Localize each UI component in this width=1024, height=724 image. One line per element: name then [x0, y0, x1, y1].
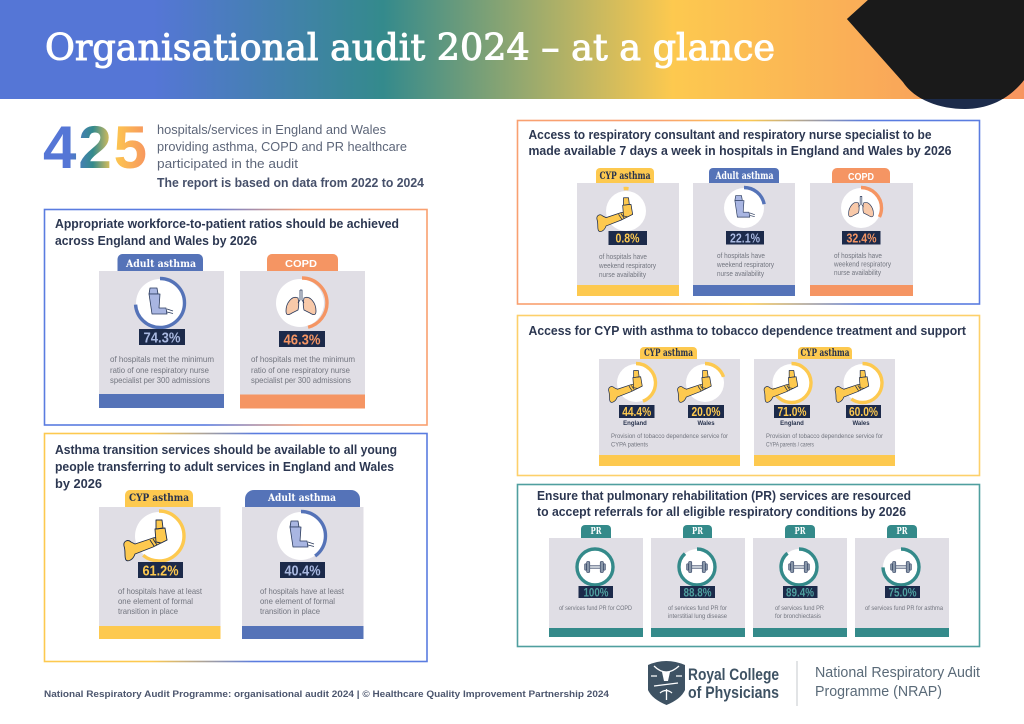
card: PR for interstitial lung disease 88.8%: interstitial lung disease [668, 613, 727, 620]
panel: asthma transition [44, 434, 427, 662]
heading: asthma transition: people transferring to adult services in England and Wales [55, 459, 394, 474]
card: PR for COPD 100% [549, 525, 643, 637]
card: PR for bronchiectasis 89.4%: PR [794, 527, 806, 537]
card: adult asthma 22.1%: weekend respiratory [716, 260, 774, 269]
intro text: providing asthma, COPD and PR healthcare [157, 140, 407, 154]
intro text: participated in the audit [157, 157, 299, 171]
footer credit: National Respiratory Audit Programme: organisational audit 2024 | © Healthcare Quality Improvement Partnership 2024 [44, 689, 609, 699]
card: PR for interstitial lung disease 88.8%: 88.8% [684, 586, 712, 600]
card: adult asthma 40.4%: of hospitals have at least [260, 586, 345, 596]
panel: pulmonary rehabilitation [518, 484, 980, 646]
card: PR for asthma 75.0%: 75.0% [888, 586, 917, 600]
heading: asthma transition: by 2026 [55, 476, 102, 491]
card: CYPA patients: Wales [697, 421, 715, 427]
heading: seven-day access [528, 127, 952, 158]
card: PR for asthma 75.0%: of services fund PR for asthma [865, 605, 943, 612]
intro text: The report is based on data from 2022 to 2024 [157, 176, 424, 190]
card: CYPA patients: Provision of tobacco dependence service for [611, 433, 729, 440]
card: CYPA parents and carers: 71.0% [778, 404, 807, 419]
card: adult asthma 74.3%: 74.3% [144, 330, 180, 346]
card: CYP asthma 0.8%: of hospitals have [599, 252, 647, 261]
card: PR for interstitial lung disease 88.8%: PR [692, 527, 703, 537]
card: CYP asthma 61.2%: one element of formal [118, 596, 193, 606]
card: CYP asthma 0.8% [577, 168, 679, 296]
heading: asthma transition [55, 442, 397, 491]
card: adult asthma 74.3%: Adult asthma [125, 259, 196, 270]
card: PR for interstitial lung disease 88.8% [651, 525, 745, 637]
card: adult asthma 22.1%: Adult asthma [715, 171, 774, 182]
heading: pulmonary rehabilitation: to accept referrals for all eligible respiratory conditions by 2026 [537, 504, 906, 519]
card: adult asthma 74.3%: of hospitals met the minimum [110, 354, 214, 364]
card: COPD 32.4%: nurse availability [834, 268, 881, 277]
logo text: NRAP: National Respiratory Audit [815, 664, 981, 681]
heading: pulmonary rehabilitation: Ensure that pulmonary rehabilitation (PR) services are resourced [537, 488, 911, 503]
card: adult asthma 40.4%: Adult asthma [267, 493, 336, 504]
intro text [157, 123, 424, 190]
card: COPD 32.4%: COPD [848, 172, 874, 183]
card: CYPA patients: CYPA patients [611, 442, 648, 448]
card: COPD 46.3%: 46.3% [284, 332, 320, 348]
heading: seven-day access: made available 7 days a week in hospitals in England and Wales by 2026 [528, 143, 952, 158]
panel: workforce ratios [44, 210, 427, 425]
card: CYPA parents and carers: CYP asthma [800, 348, 850, 359]
heading: workforce ratios [55, 216, 399, 248]
card: adult asthma 22.1%: nurse availability [717, 269, 764, 278]
card: PR for COPD 100%: PR [590, 527, 602, 537]
card: adult asthma 22.1% [693, 168, 795, 296]
card: CYP asthma 0.8%: weekend respiratory [598, 261, 656, 270]
heading: workforce ratios: across England and Wales by 2026 [55, 233, 257, 248]
card: CYP asthma 61.2%: 61.2% [142, 562, 178, 580]
card: CYP asthma 61.2%: CYP asthma [129, 493, 189, 504]
card: PR for bronchiectasis 89.4% [753, 525, 847, 637]
card: COPD 46.3%: of hospitals met the minimum [251, 354, 355, 364]
panel: tobacco dependence [518, 316, 980, 476]
card: CYPA parents and carers: England [780, 421, 804, 427]
card: CYP asthma 61.2%: of hospitals have at least [118, 586, 203, 596]
card: adult asthma 74.3% [99, 254, 224, 408]
card: CYP asthma 0.8%: 0.8% [616, 230, 640, 246]
card: CYPA patients [599, 347, 740, 466]
card: PR for bronchiectasis 89.4%: of services fund PR [775, 605, 824, 612]
card: COPD 32.4%: of hospitals have [834, 251, 882, 260]
logo: Royal College of Physicians [648, 661, 779, 705]
heading: asthma transition: Asthma transition services should be available to all young [55, 442, 397, 457]
logo text: NRAP [815, 664, 981, 700]
card: adult asthma 74.3%: ratio of one respiratory nurse [110, 365, 209, 375]
card: PR for asthma 75.0%: PR [896, 527, 908, 537]
card: adult asthma 40.4%: transition in place [260, 606, 320, 616]
header banner [0, 0, 1024, 109]
title: Organisational audit 2024 – at a glance [45, 28, 775, 69]
card: CYPA parents and carers: Wales [852, 421, 870, 427]
card: PR for COPD 100%: of services fund PR for COPD [559, 605, 632, 612]
card: COPD 32.4%: weekend respiratory [833, 260, 891, 268]
card: adult asthma 22.1%: 22.1% [730, 230, 760, 246]
card: CYPA parents and carers: 60.0% [849, 404, 878, 419]
heading: workforce ratios: Appropriate workforce-to-patient ratios should be achieved [55, 216, 399, 231]
card: CYPA patients: 20.0% [692, 404, 721, 419]
card: CYPA patients: England [623, 421, 647, 427]
card: adult asthma 74.3%: specialist per 300 admissions [110, 375, 210, 385]
logo text: NRAP: Programme (NRAP) [815, 683, 942, 700]
card: CYP asthma 61.2%: transition in place [118, 606, 178, 616]
card: CYPA patients: CYP asthma [644, 348, 693, 359]
card: CYP asthma 0.8%: nurse availability [599, 270, 646, 279]
heading: pulmonary rehabilitation [537, 488, 911, 519]
key figure: 425: 425 [43, 114, 147, 181]
card: PR for interstitial lung disease 88.8%: of services fund PR for [668, 605, 728, 612]
divider [796, 661, 798, 706]
logo: Royal College of Physicians: Royal College [688, 665, 779, 684]
card: CYPA parents and carers: CYPA parents / carers [766, 442, 814, 448]
card: COPD 46.3% [240, 254, 365, 408]
card: adult asthma 22.1%: of hospitals have [717, 251, 765, 260]
card: PR for asthma 75.0% [855, 525, 949, 637]
card: CYPA parents and carers: Provision of tobacco dependence service for [766, 433, 884, 440]
card: CYP asthma 61.2% [99, 490, 220, 639]
icon: shield crest [648, 661, 685, 705]
card: CYP asthma 0.8%: CYP asthma [600, 171, 651, 182]
card: CYPA parents and carers [754, 347, 895, 466]
logo: Royal College of Physicians: of Physicians [688, 683, 779, 702]
card: PR for COPD 100%: 100% [584, 586, 609, 600]
card: PR for bronchiectasis 89.4%: for bronchiectasis [775, 613, 821, 620]
heading: tobacco dependence: Access for CYP with asthma to tobacco dependence treatment and support [528, 323, 967, 338]
card: COPD 32.4%: 32.4% [846, 230, 877, 246]
card: PR for bronchiectasis 89.4%: 89.4% [786, 586, 814, 600]
card: COPD 46.3%: specialist per 300 admissions [251, 375, 351, 385]
card: COPD 46.3%: ratio of one respiratory nurse [251, 365, 350, 375]
card: COPD 32.4% [810, 168, 913, 296]
card: adult asthma 40.4% [242, 490, 364, 639]
heading: seven-day access: Access to respiratory consultant and respiratory nurse specialist to be [528, 127, 932, 142]
panel: seven-day access [518, 120, 980, 304]
card: COPD 46.3%: COPD [285, 259, 317, 270]
card: adult asthma 40.4%: 40.4% [284, 562, 320, 580]
intro text: hospitals/services in England and Wales [157, 123, 386, 137]
card: CYPA patients: 44.4% [622, 404, 652, 419]
card: adult asthma 40.4%: one element of formal [260, 596, 335, 606]
